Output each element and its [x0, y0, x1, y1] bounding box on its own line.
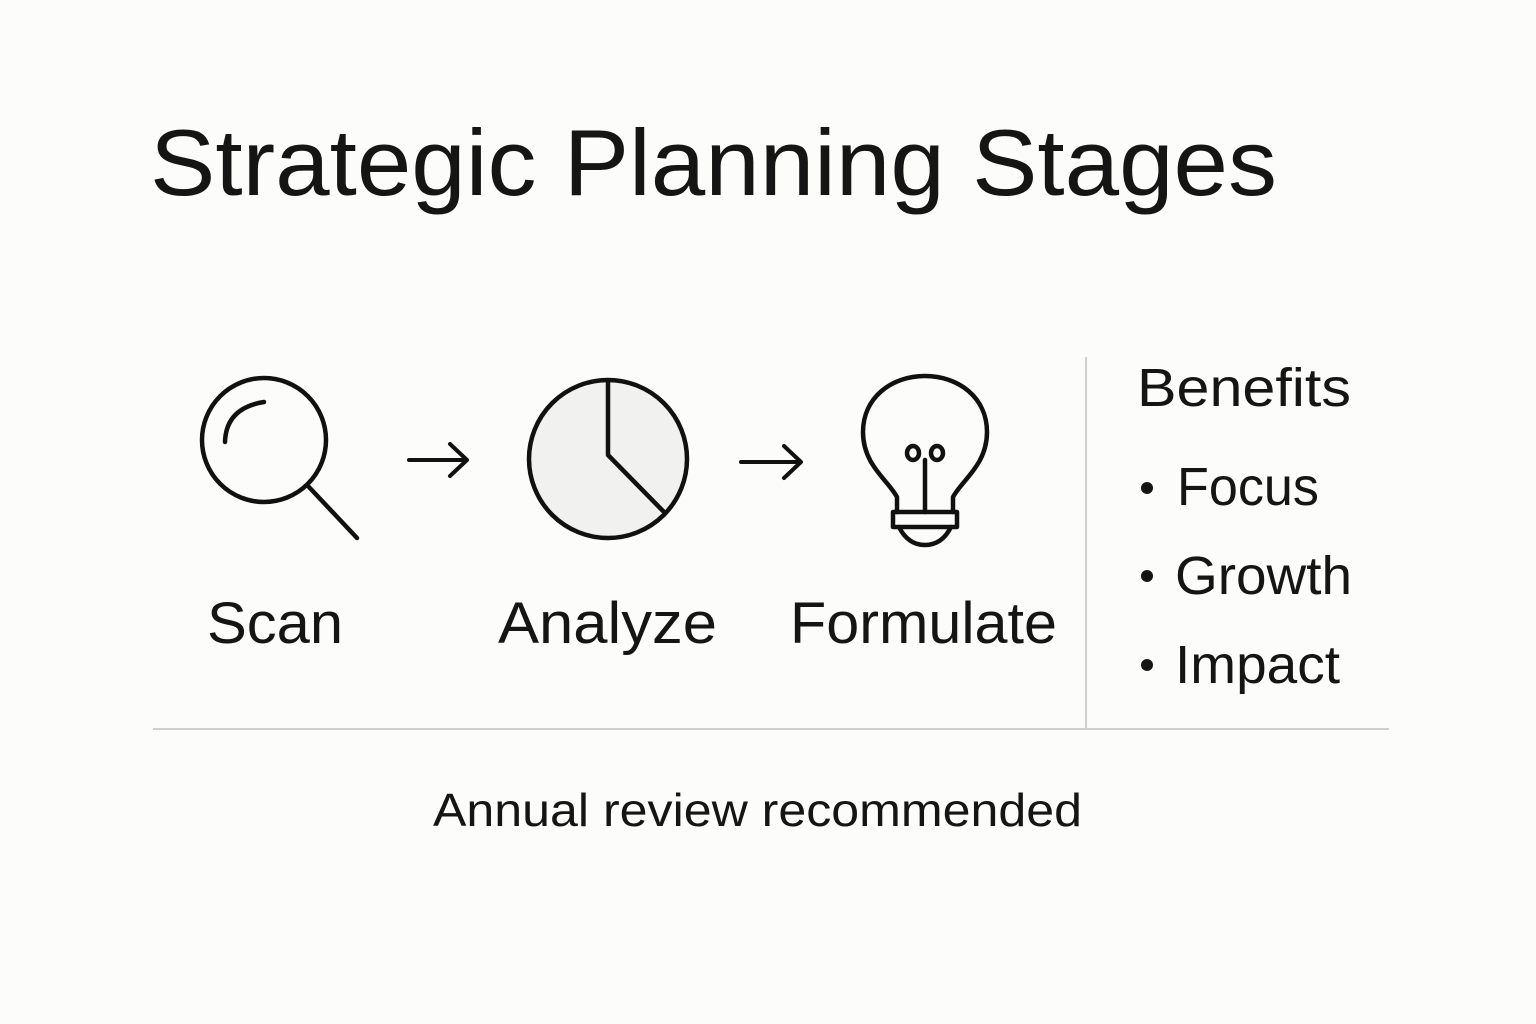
title: Strategic Planning Stages	[150, 110, 1277, 215]
arrow 2	[741, 446, 801, 478]
panel: benefits	[1137, 358, 1352, 695]
panel: benefits: Growth	[1175, 546, 1352, 606]
panel: benefits: Impact	[1175, 635, 1340, 695]
panel: benefits: Focus	[1177, 457, 1319, 517]
icon: pie chart	[529, 380, 687, 538]
stage labels: Analyze	[498, 591, 717, 656]
stage labels: Scan	[207, 591, 343, 656]
panel: benefits: Benefits	[1137, 358, 1351, 418]
stage labels	[207, 591, 1057, 656]
divider vertical	[1085, 357, 1087, 728]
stage labels: Formulate	[790, 591, 1057, 656]
icon: light bulb	[863, 376, 987, 545]
footer note: Annual review recommended	[433, 784, 1082, 836]
divider horizontal	[153, 728, 1389, 730]
arrow 1	[409, 444, 467, 476]
icon: magnifier	[202, 378, 357, 538]
